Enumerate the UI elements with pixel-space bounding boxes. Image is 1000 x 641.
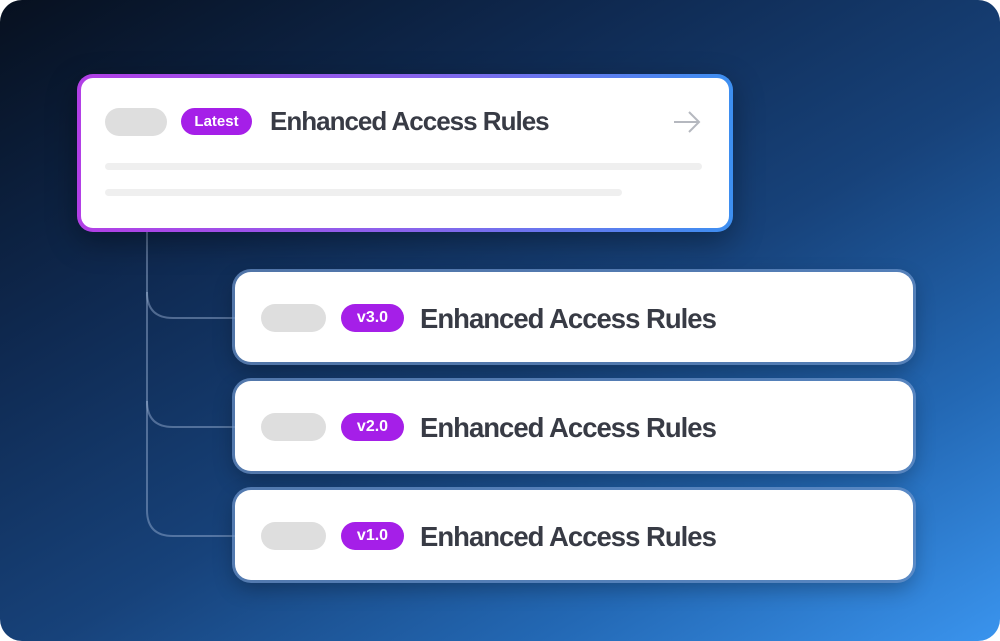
card: v3.0: Enhanced Access Rules xyxy=(420,303,716,334)
card: v1.0 xyxy=(235,490,913,580)
card: v2.0 xyxy=(235,381,913,471)
card: v2.0: Enhanced Access Rules xyxy=(420,412,716,443)
placeholder line 1 xyxy=(105,163,702,170)
card: v1.0: Enhanced Access Rules xyxy=(420,521,716,552)
badge: Latest: Latest xyxy=(194,113,239,130)
placeholder line 2 xyxy=(105,189,622,196)
pill placeholder xyxy=(105,108,167,136)
badge: Latest xyxy=(181,108,252,135)
icon: arrow xyxy=(674,111,700,133)
card: v3.0: v3.0 xyxy=(357,309,388,326)
card: v2.0: v2.0 xyxy=(357,418,388,435)
main card: Latest xyxy=(77,74,733,232)
title: Enhanced Access Rules xyxy=(270,106,549,136)
card: v3.0 xyxy=(235,272,913,362)
card: v1.0: v1.0 xyxy=(357,527,388,544)
